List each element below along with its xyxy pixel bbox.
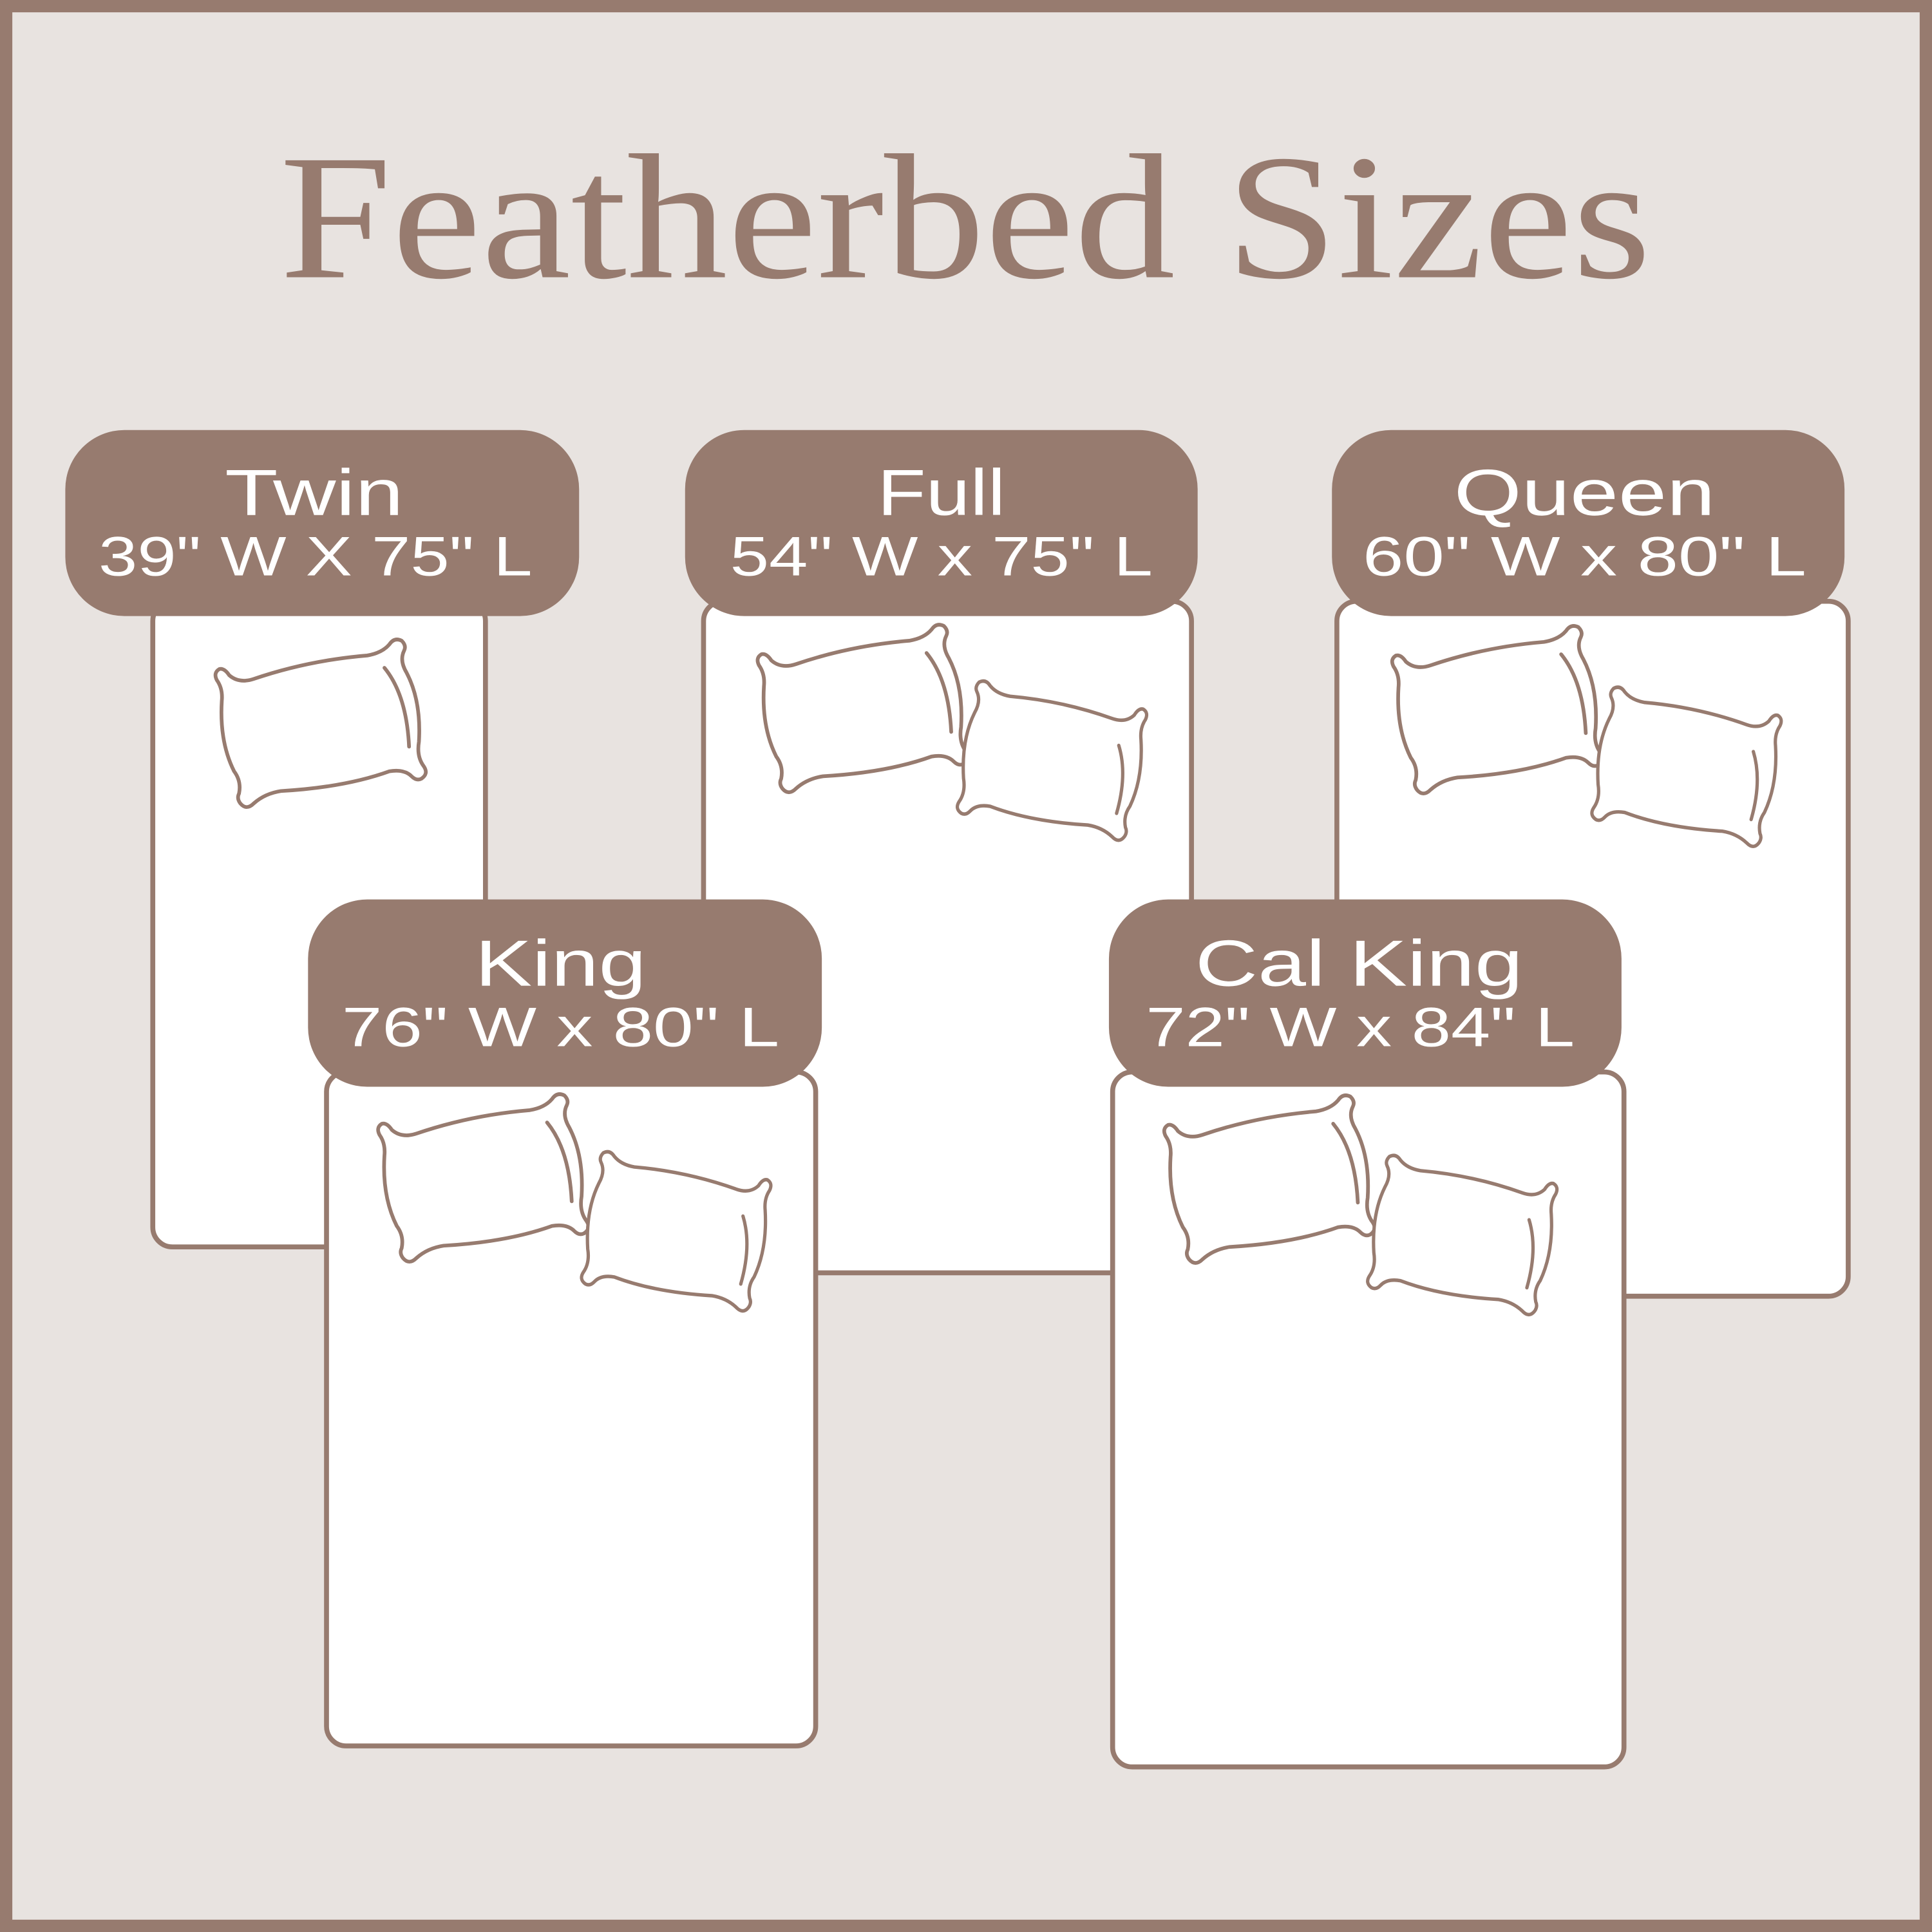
mattress: full (703, 601, 1191, 1273)
icon: twin pillow (216, 639, 426, 807)
label: full: Full (877, 457, 1005, 529)
panel: cal king (1113, 1072, 1624, 1767)
label: cal king: Cal King (1195, 927, 1523, 1000)
title: Featherbed Sizes (279, 118, 1651, 316)
mattress: twin (153, 601, 486, 1247)
mattress: queen (1337, 601, 1848, 1296)
label: twin: Twin (225, 457, 404, 529)
label: queen (1332, 430, 1844, 616)
icon: full pillows (757, 625, 1147, 840)
icon: king pillows (378, 1094, 771, 1311)
label: full: 54" W x 75" L (730, 526, 1153, 587)
icon: queen pillows (1392, 626, 1781, 846)
label: twin (65, 430, 579, 616)
label: king: 76" W x 80" L (342, 996, 779, 1058)
label: king (308, 900, 822, 1087)
label: queen: 60" W x 80" L (1363, 526, 1806, 587)
label: queen: Queen (1454, 457, 1715, 529)
icon: cal king pillows (1164, 1095, 1557, 1314)
panel: full (703, 601, 1191, 1273)
panel: king (327, 1072, 816, 1746)
label: twin: 39" W X 75" L (99, 526, 533, 587)
label: cal king: 72" W x 84" L (1146, 996, 1575, 1058)
label: full (685, 430, 1198, 616)
panel: twin (153, 601, 486, 1247)
mattress: cal king (1113, 1072, 1624, 1767)
label: king: King (475, 927, 647, 1000)
panel: queen (1337, 601, 1848, 1296)
mattress: king (327, 1072, 816, 1746)
label: cal king (1109, 900, 1622, 1087)
